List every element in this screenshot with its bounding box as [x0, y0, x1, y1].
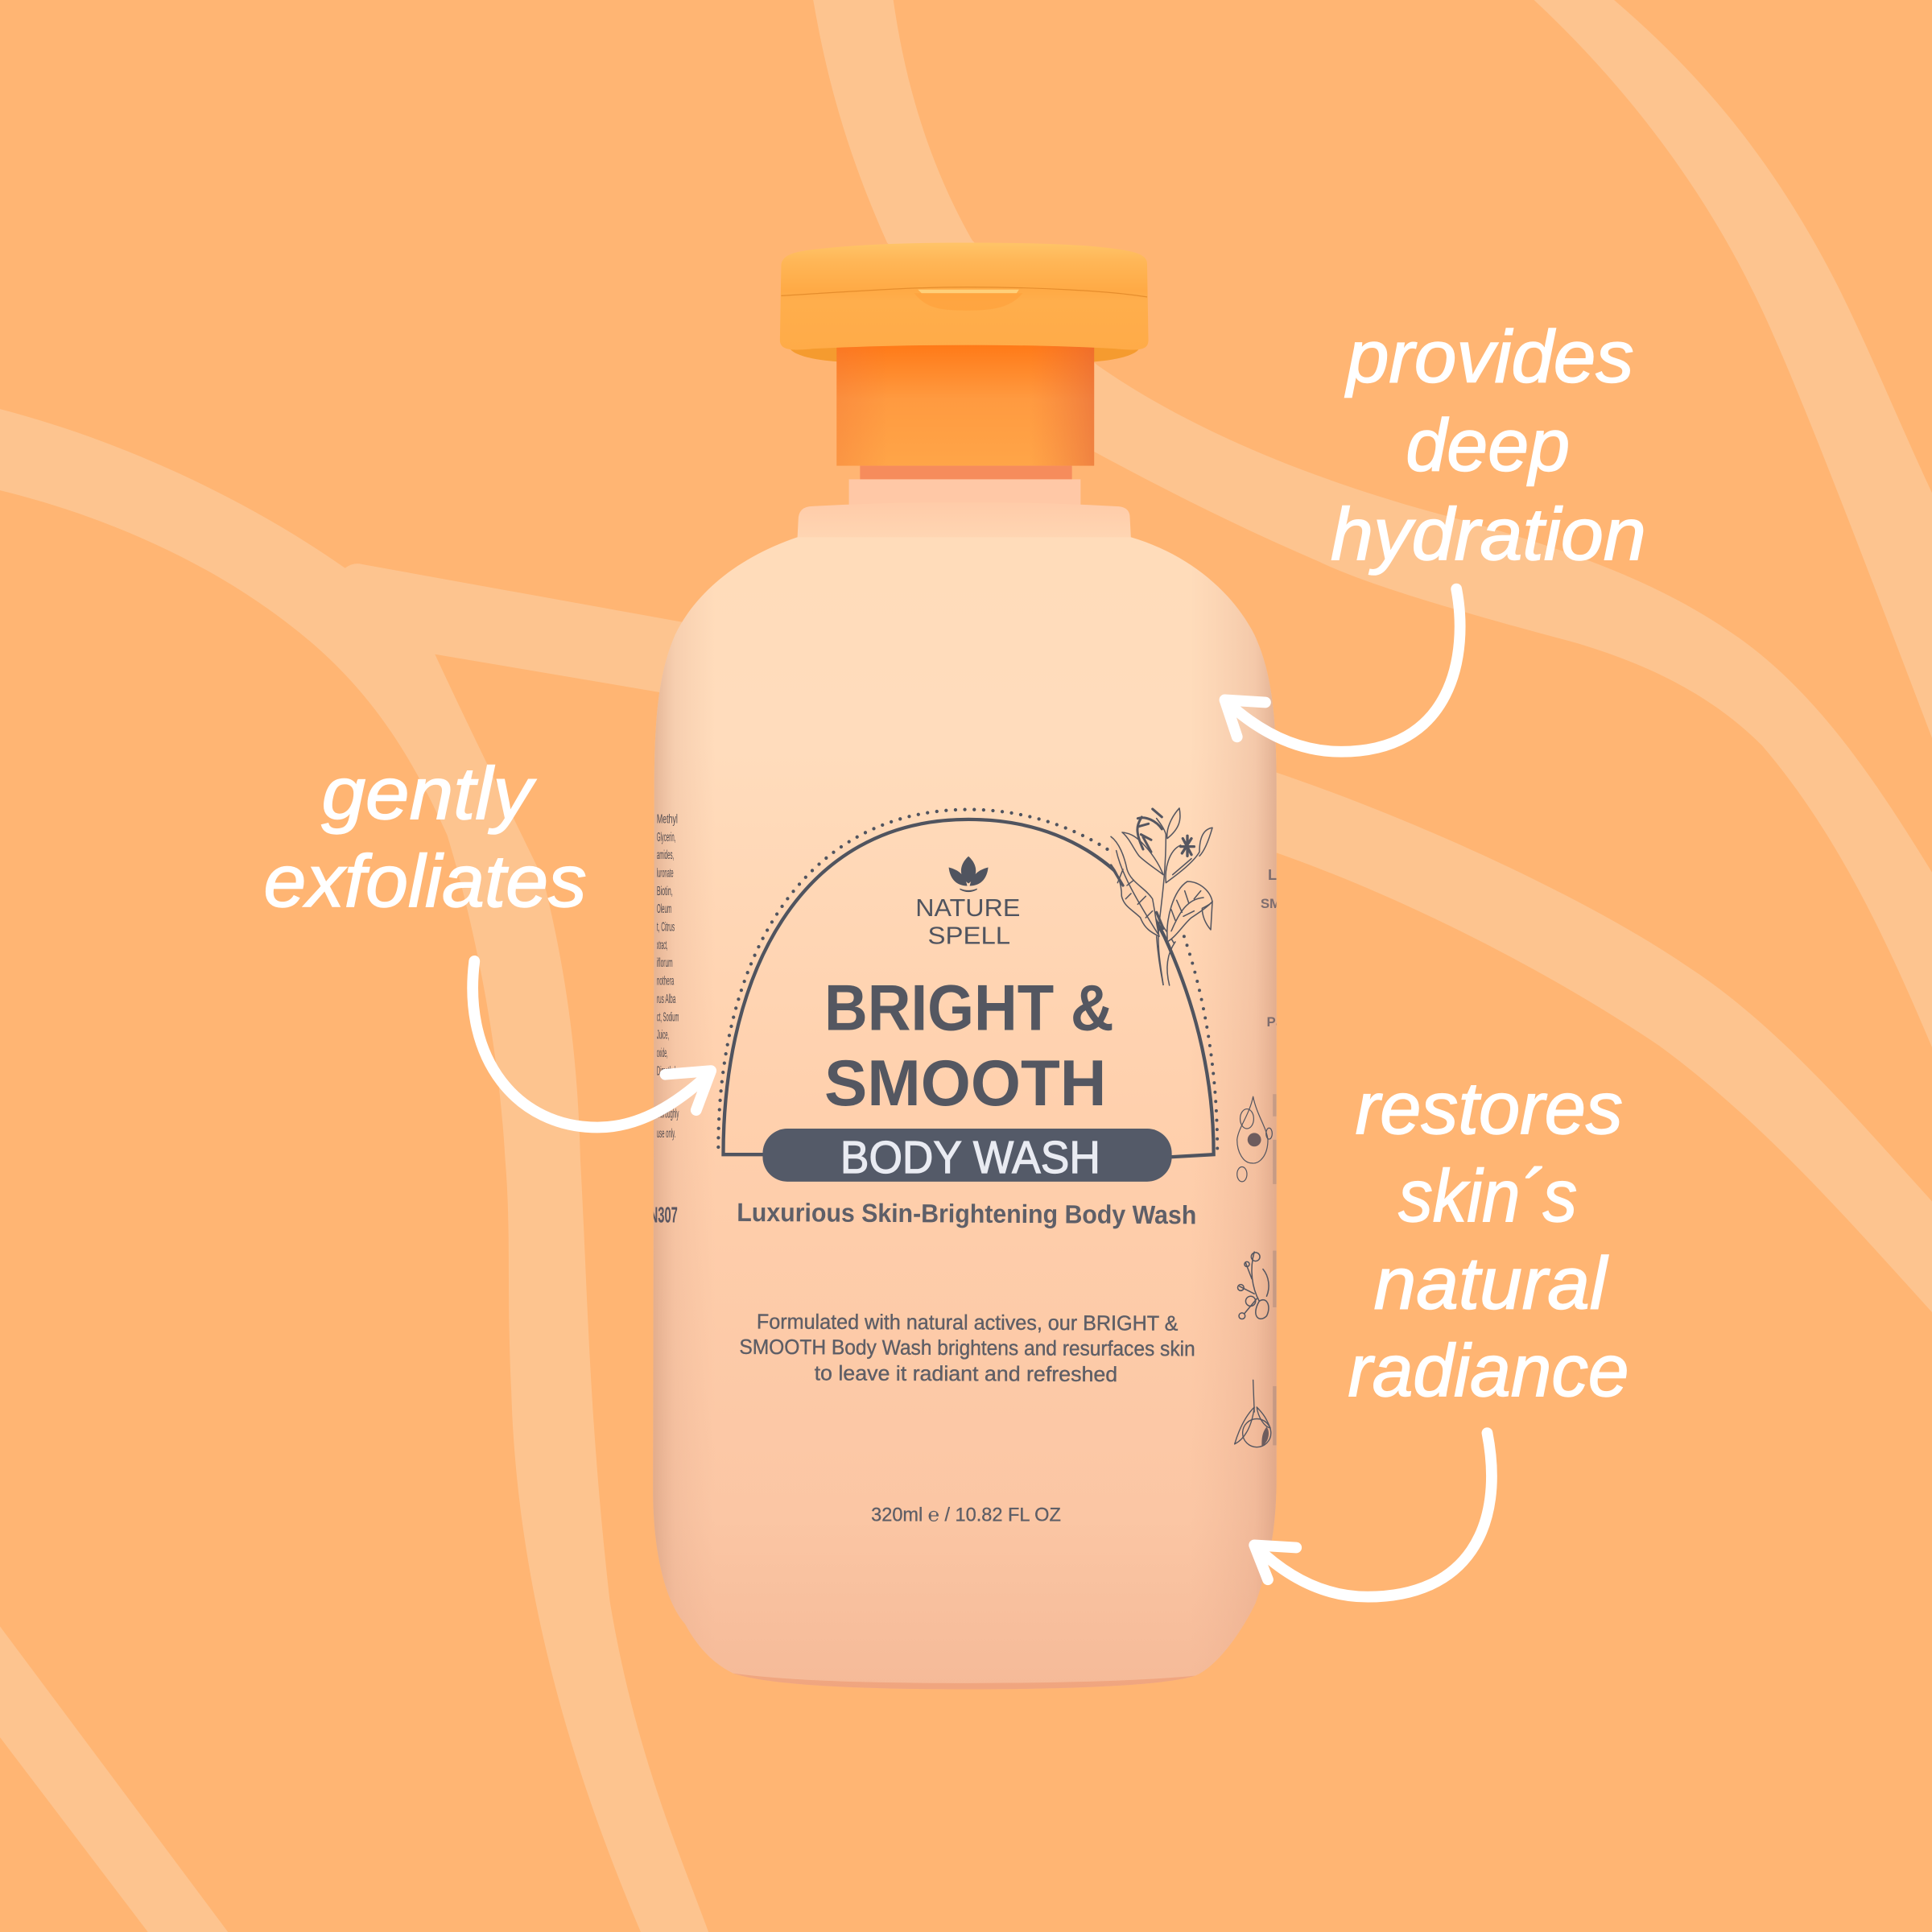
icon: herb cluster: [1238, 1252, 1269, 1319]
flip-top lid: [780, 243, 1149, 350]
logo wordmark: SPELL: [928, 922, 1010, 949]
arrow: to label: [473, 961, 711, 1128]
side ingredients text: nothera: [657, 975, 674, 989]
icon: citrus fruit: [1235, 1380, 1271, 1447]
arrow: to lower bottle: [1254, 1433, 1492, 1597]
icon: droplet with molecules: [1237, 1096, 1272, 1182]
side ingredients text: iflorum: [657, 956, 673, 970]
infographic canvas: use only.: [657, 1127, 675, 1141]
side panel text fragments: SMO: [1261, 896, 1291, 911]
orange collar: [836, 345, 1094, 466]
callout: gently exfoliates: gently: [321, 753, 537, 835]
side panel text fragments: [1261, 869, 1277, 1446]
bottle neck: [849, 479, 1080, 506]
bottle shoulder: [797, 502, 1131, 542]
logo wordmark: [915, 894, 1020, 949]
callout: restores skin's natural radiance: radiance: [1348, 1330, 1629, 1412]
bottle: [653, 243, 1277, 1689]
side ingredients text: t, Citrus: [657, 921, 675, 935]
side ingredients text: Oleum: [657, 902, 671, 916]
callout: restores skin's natural radiance: natural: [1374, 1243, 1609, 1325]
side ingredients text: Biotin,: [657, 885, 673, 898]
volume: 320ml ℮ / 10.82 FL OZ: [871, 1505, 1061, 1526]
callout: gently exfoliates: [264, 753, 587, 923]
callout: provides deep hydration: hydration: [1331, 493, 1646, 576]
description: to leave it radiant and refreshed: [815, 1360, 1117, 1386]
description: SMOOTH Body Wash brightens and resurfaces skin: [739, 1335, 1195, 1360]
side code: N307: [650, 1202, 678, 1227]
callout: provides deep hydration: deep: [1406, 405, 1570, 487]
infographic canvas: Glycerin,: [657, 831, 675, 844]
tagline: Luxurious Skin-Brightening Body Wash: [737, 1198, 1196, 1229]
product title: BRIGHT &: [824, 972, 1114, 1045]
callout: restores skin's natural radiance: skin´s: [1398, 1155, 1577, 1237]
side panel text fragments: Pa: [1266, 1014, 1284, 1030]
product title: [824, 972, 1114, 1120]
neck ring: [860, 466, 1072, 481]
side ingredients text: [657, 812, 679, 1141]
side ingredients text: Juice,: [657, 1029, 669, 1042]
description: [739, 1309, 1195, 1386]
callout: gently exfoliates: exfoliates: [264, 840, 587, 923]
logo wordmark: NATURE: [915, 894, 1020, 922]
infographic canvas: ct, Sodium: [657, 1010, 679, 1024]
body wash pill: [762, 1129, 1172, 1183]
side ingredients text: xtract,: [657, 939, 668, 952]
side ingredients text: amides,: [657, 848, 674, 862]
description: Formulated with natural actives, our BRIGHT &: [757, 1309, 1179, 1335]
logo: leaf mark: [949, 857, 989, 892]
side ingredients text: oxide,: [657, 1046, 668, 1060]
callout: restores skin's natural radiance: restores: [1356, 1067, 1623, 1150]
callout: restores skin's natural radiance: [1348, 1067, 1629, 1412]
callout: provides deep hydration: provides: [1344, 316, 1634, 398]
cap lip underside: [789, 346, 1140, 362]
side ingredients text: rus Alba: [657, 993, 676, 1006]
bottle body: [653, 537, 1277, 1689]
side ingredients text: Methyl: [657, 812, 678, 826]
infographic canvas: Dimethyl: [657, 1064, 675, 1078]
product title: SMOOTH: [824, 1047, 1106, 1120]
illustration: botanical sprig: [1111, 808, 1212, 985]
label: arch frame: [718, 810, 1217, 1157]
body wash pill: BODY WASH: [840, 1133, 1100, 1183]
side ingredients text: luronate: [657, 866, 674, 880]
side panel text fragments: Li: [1268, 866, 1281, 883]
infographic canvas: thoroughly: [657, 1107, 679, 1121]
callout: provides deep hydration: [1331, 316, 1646, 576]
arrow: to upper bottle: [1224, 589, 1460, 752]
